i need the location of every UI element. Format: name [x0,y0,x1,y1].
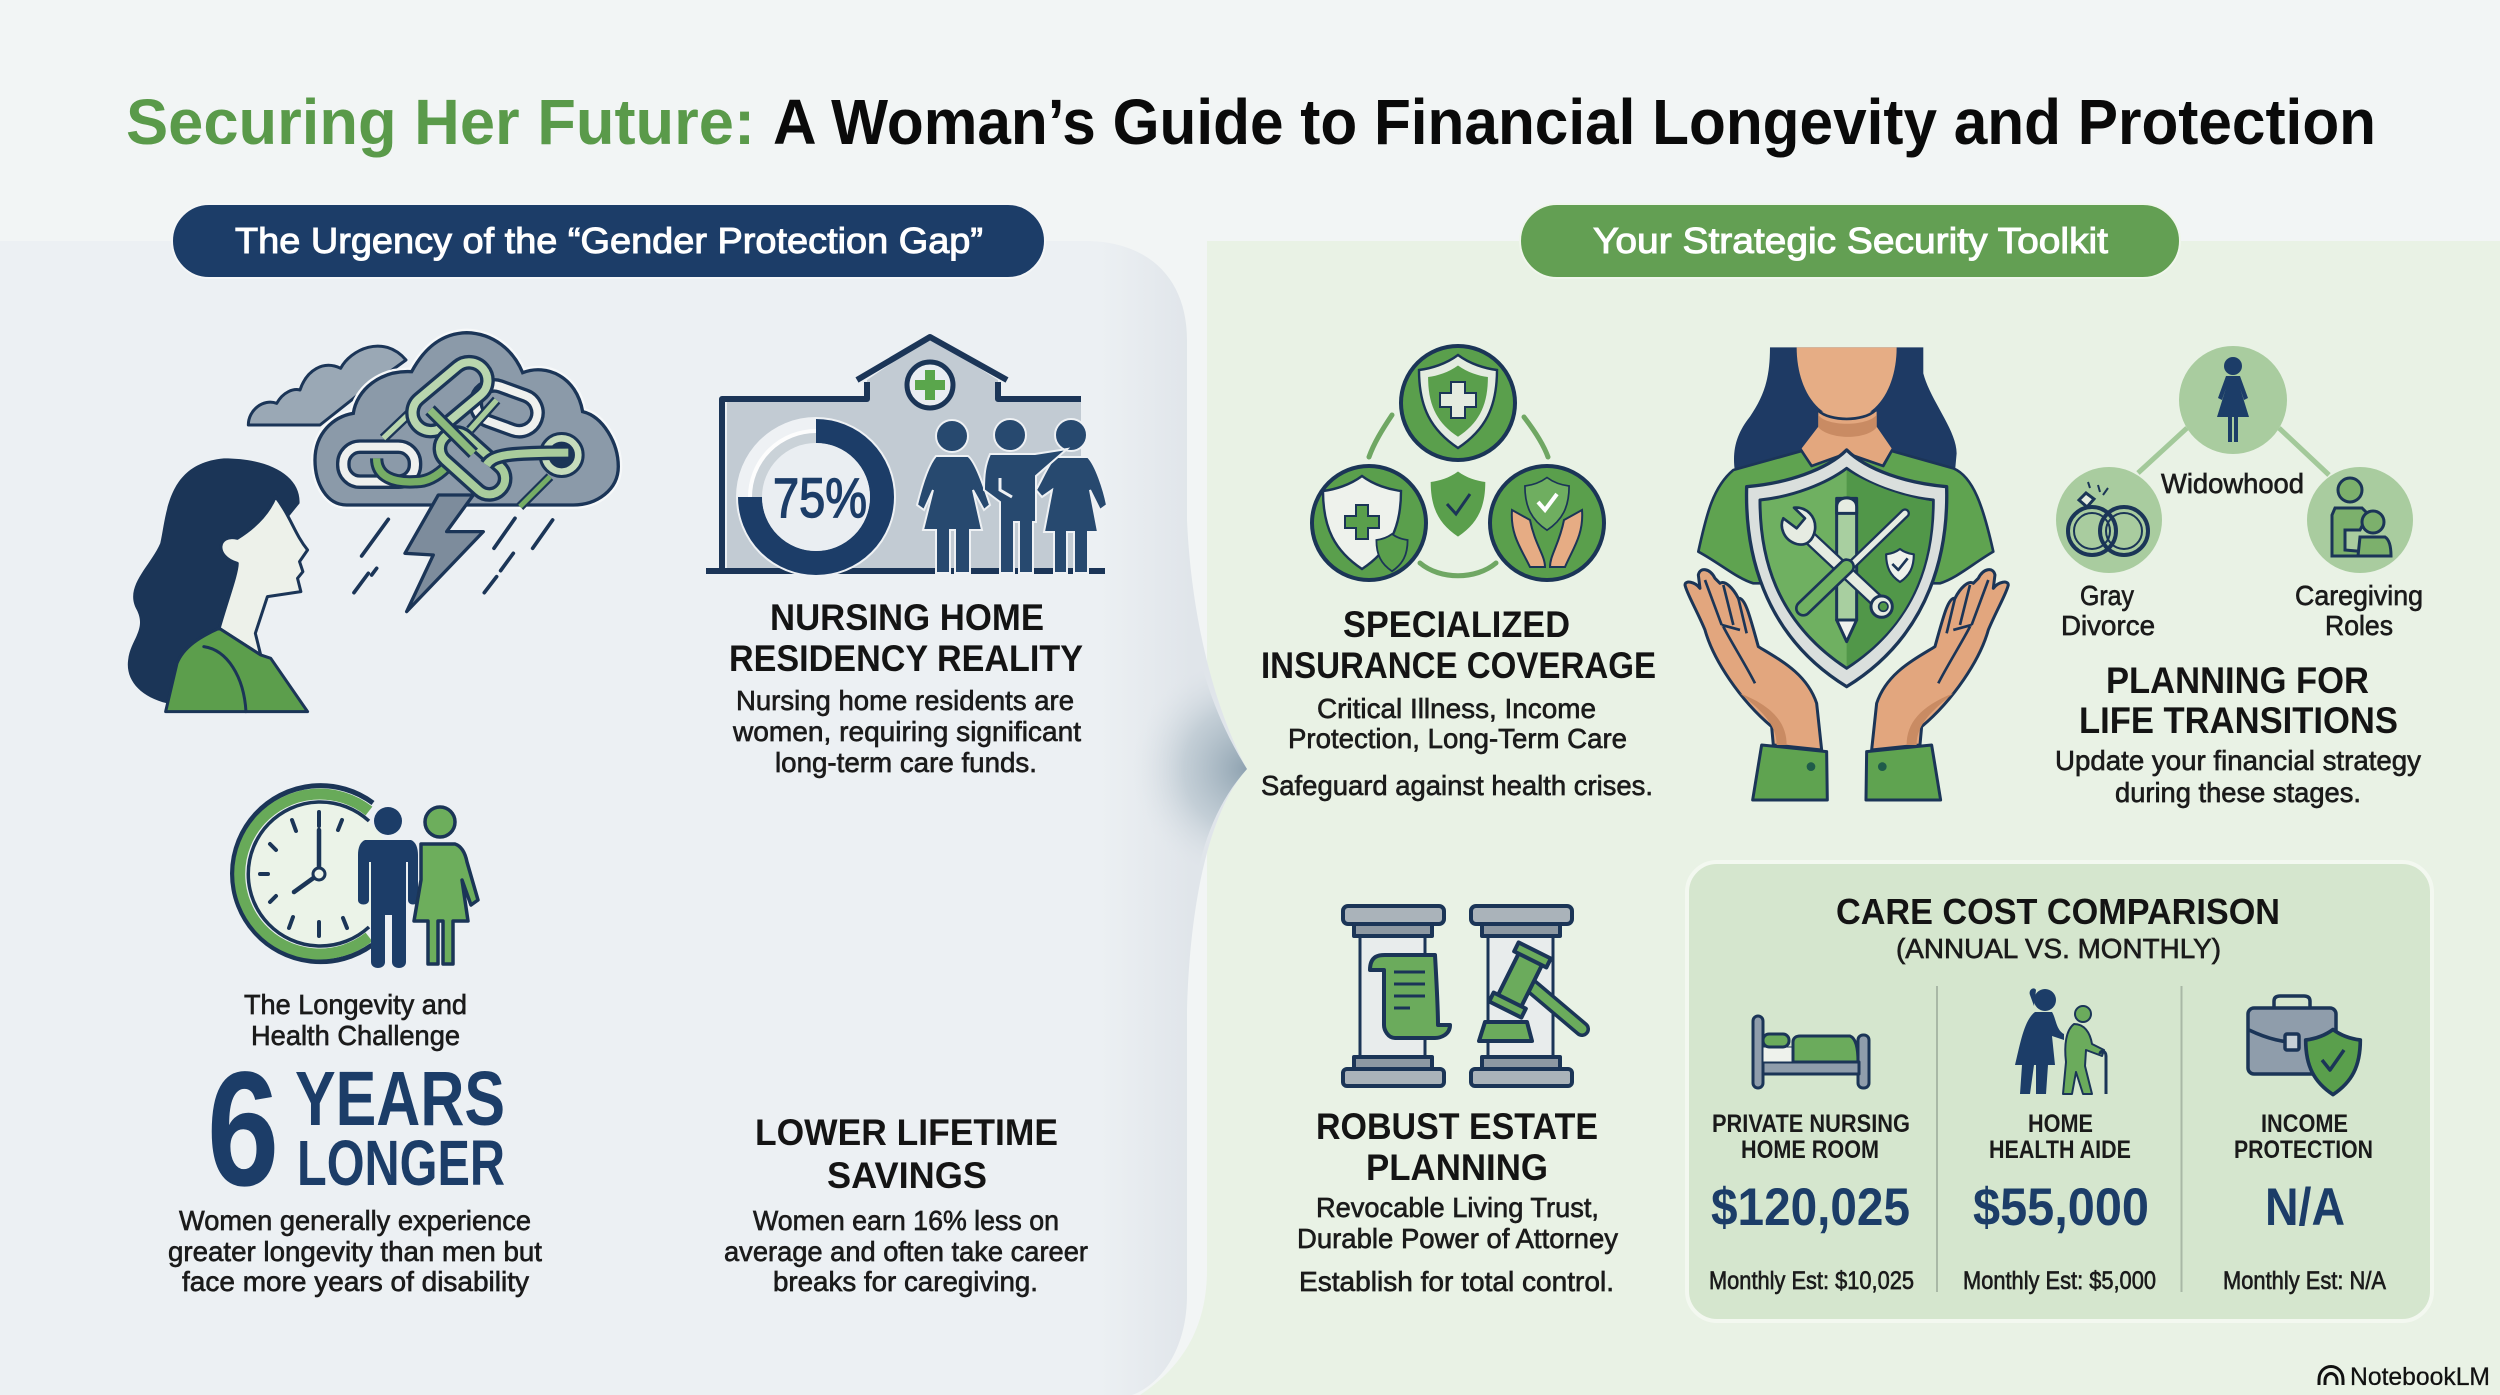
icon: insurance shields trio [1312,346,1604,580]
column: private nursing home room: HOME ROOM [1741,1136,1879,1164]
left hand [1685,570,1827,800]
text: savings description: Women earn 16% less on [753,1205,1059,1236]
column: private nursing home room: $120,025 [1711,1178,1910,1237]
heading: robust estate planning: PLANNING [1366,1147,1548,1188]
heading: specialized insurance coverage: INSURANCE COVERAGE [1261,645,1656,686]
text: insurance description: Critical Illness, Income [1317,693,1596,724]
heading: specialized insurance coverage [1261,604,1656,686]
heading: lower lifetime savings [755,1112,1058,1196]
heading: robust estate planning: ROBUST ESTATE [1316,1106,1598,1147]
text: insurance description: Protection, Long-Term Care [1288,723,1627,754]
heading pill: strategic toolkit [1520,204,2180,278]
icon: nursing home with 75% donut and residents [706,337,1107,577]
text: life transitions description [2055,745,2421,808]
labels: life transition stages: Caregiving [2295,580,2423,611]
text: insurance description: Safeguard against health crises. [1261,770,1653,801]
icon: bed [1753,1016,1869,1088]
column: home health aide [1963,1110,2156,1295]
title [126,86,2376,158]
icon: widowhood figure [2217,357,2249,442]
column: income protection [2223,1110,2386,1295]
text: nursing home description: Nursing home residents are [736,685,1074,716]
labels: life transition stages: Roles [2325,610,2393,641]
heading: nursing home residency [729,597,1083,679]
text: estate planning description: Establish for total control. [1299,1266,1614,1297]
text: longevity description: Women generally experience [179,1205,531,1236]
icon: briefcase with shield [2248,996,2360,1095]
column: private nursing home room: Monthly Est: $10,025 [1709,1267,1914,1295]
text: estate planning description [1297,1192,1618,1297]
icon: storm cloud with tangled chains [248,333,618,612]
text: nursing home description: long-term care funds. [775,747,1037,778]
heading pill: strategic toolkit: Your Strategic Security Toolkit [1593,220,2108,261]
column: income protection: N/A [2265,1178,2345,1237]
labels: life transition stages: Gray [2080,580,2134,611]
diagram: life transitions [2056,346,2413,573]
heading: planning for life transitions: PLANNING FOR [2106,660,2369,701]
text: estate planning description: Durable Power of Attorney [1297,1223,1618,1254]
heading: robust estate planning [1316,1106,1598,1188]
column: income protection: PROTECTION [2234,1136,2373,1164]
stat: 6 years longer: LONGER [297,1127,505,1199]
heading: lower lifetime savings: SAVINGS [827,1155,987,1196]
text: savings description [724,1205,1088,1297]
panel: left urgency background [0,241,1247,1395]
text: longevity heading: Health Challenge [251,1020,460,1051]
heading pill: gender protection gap [172,204,1045,278]
icon: woman in profile [128,458,308,712]
column: private nursing home room [1709,1110,1914,1295]
column: home health aide: Monthly Est: $5,000 [1963,1267,2156,1295]
icon: estate planning pillars with scroll and gavel [1343,906,1582,1086]
text: longevity description: greater longevity than men but [168,1236,542,1267]
text: life transitions description: Update your financial strategy [2055,745,2421,776]
text: nursing home description: women, requiring significant [732,716,1081,747]
figure: woman [414,807,478,964]
column: home health aide: $55,000 [1973,1178,2149,1237]
residents group [917,419,1107,573]
heading: planning for life transitions [2079,660,2398,741]
heading: nursing home residency: NURSING HOME [770,597,1044,638]
text: savings description: breaks for caregiving. [773,1266,1038,1297]
heading: planning for life transitions: LIFE TRANSITIONS [2079,700,2398,741]
title: Securing Her Future: [126,86,755,158]
right hand [1866,570,2008,800]
labels: life transition stages: Widowhood [2161,468,2304,499]
text: longevity heading [244,989,467,1051]
logo: NotebookLM: NotebookLM [2350,1363,2490,1391]
text: life transitions description: during these stages. [2115,777,2361,808]
text: insurance description [1261,693,1653,801]
heading: nursing home residency: RESIDENCY REALITY [729,638,1083,679]
heading: specialized insurance coverage: SPECIALIZED [1343,604,1570,645]
text: estate planning description: Revocable Living Trust, [1316,1192,1599,1223]
panel: care cost comparison [1687,862,2432,1321]
column: home health aide: HOME [2028,1110,2093,1138]
labels: life transition stages [2061,468,2423,641]
stat: 6 years longer: YEARS [295,1056,505,1142]
figure: man [358,807,418,968]
text: longevity heading: The Longevity and [244,989,467,1020]
text: savings description: average and often take career [724,1236,1088,1267]
heading: care cost comparison: CARE COST COMPARISON [1836,891,2280,932]
column: home health aide: HEALTH AIDE [1989,1136,2131,1164]
illustration: woman holding shield with tools [1685,347,2008,800]
stat: 6 years longer [207,1037,505,1220]
subheading: annual vs monthly: (ANNUAL VS. MONTHLY) [1896,933,2221,964]
column: income protection: INCOME [2261,1110,2348,1138]
donut value: 75% [773,466,867,529]
text: longevity description [168,1205,542,1297]
icon: wedding rings [2068,482,2148,555]
icon: home health aide [2015,988,2106,1094]
title: A Woman’s Guide to Financial Longevity and Protection [773,86,2376,158]
icon: caregiver and child [2332,478,2391,556]
text: nursing home description [732,685,1081,778]
text: longevity description: face more years of disability [182,1266,529,1297]
labels: life transition stages: Divorce [2061,610,2155,641]
column: income protection: Monthly Est: N/A [2223,1267,2386,1295]
emblem: shield [1747,450,1947,687]
column: private nursing home room: PRIVATE NURSING [1712,1110,1910,1138]
stat: 6 years longer: 6 [207,1037,279,1220]
heading pill: gender protection gap: The Urgency of the “Gender Protection Gap” [235,220,983,261]
icon: clock with man and woman [233,786,478,968]
panel: right toolkit background [1140,241,2500,1395]
heading: lower lifetime savings: LOWER LIFETIME [755,1112,1058,1153]
